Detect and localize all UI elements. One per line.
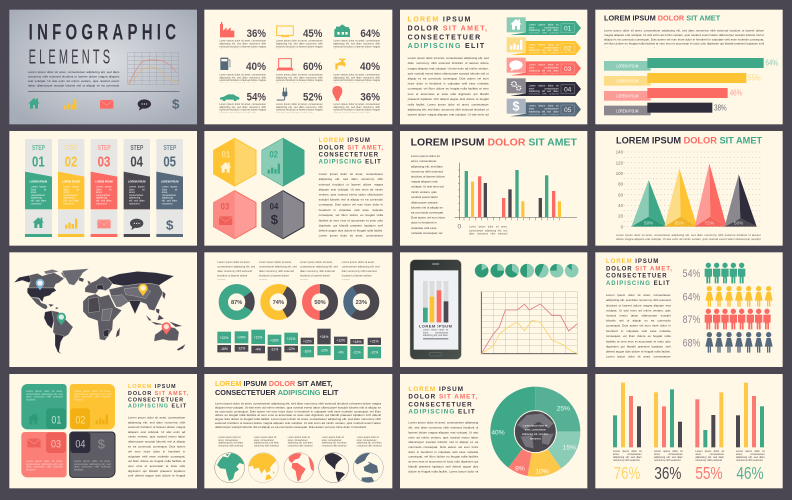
heading: CONSECTETUER ADIPISCING ELIT [215, 388, 338, 397]
stat row: 54% [683, 263, 745, 283]
pie chart: 8% [515, 466, 525, 473]
globe green [215, 453, 246, 483]
step 01 column [25, 139, 52, 237]
column group 36% [654, 389, 683, 483]
split bars: +12% [336, 339, 345, 343]
quadrant 04: $ [98, 436, 106, 451]
globe slate [353, 453, 383, 483]
pyramid yellow [664, 168, 697, 227]
stat: 40%: 40% [246, 61, 266, 73]
hexagon 02 [262, 138, 304, 186]
column group 55%: 55% [695, 463, 723, 483]
small pies [475, 264, 578, 277]
globe captions: Lorem ipsum dolor sit amet, consectetuer adipiscing elit, sed diam nonummy nibh euismod [254, 436, 279, 447]
hexagon 03 [214, 191, 256, 239]
quadrant 02: 02 [75, 415, 85, 427]
arrow 02 [507, 37, 581, 55]
step 02 column [58, 139, 84, 237]
pyramid green: 50% [644, 220, 653, 225]
bar: 38% [604, 103, 727, 115]
step 02 column: 02 [65, 155, 77, 171]
step 01 column: 01 [32, 155, 45, 171]
heading: CONSECTETUER [606, 274, 668, 280]
donut 23% [343, 283, 380, 321]
step 04 column: LOREM IPSUM [128, 180, 145, 183]
heading: LOREM IPSUM [128, 384, 177, 390]
phone [410, 260, 461, 359]
pin coral [162, 322, 171, 335]
column group 36%: 36% [654, 463, 681, 483]
icon: bars [64, 99, 76, 109]
icon: monitor [277, 26, 293, 37]
step 03 column: 03 [98, 155, 110, 171]
step 04 column: 04 [130, 155, 144, 171]
pyramid green [631, 180, 666, 227]
quadrant 03: 03 [51, 439, 61, 451]
icon: house [28, 98, 40, 109]
pin yellow [138, 284, 148, 296]
heading: LOREM IPSUM [408, 17, 472, 24]
panel: people pictograms [595, 252, 783, 367]
quadrant 04: 04 [75, 439, 85, 451]
heading: LOREM IPSUM DOLOR SIT AMET, [215, 379, 332, 388]
column group 76% [613, 383, 642, 483]
stat: 64%: 64% [360, 28, 380, 40]
step 02 column: STEP [65, 143, 78, 152]
quadrant 04 [70, 432, 115, 477]
heading: infographic: INFOGRAPHIC [29, 19, 176, 44]
stat row: 54%: 54% [683, 268, 701, 280]
bar: 46% [604, 88, 743, 101]
stat: 52%: 52% [303, 92, 322, 104]
stat: 60%: 60% [303, 61, 322, 73]
icon: laptop base [276, 68, 294, 70]
hexagon 03: 03 [221, 202, 229, 212]
arrow 02: 02 [564, 46, 572, 53]
bar: 55%: LOREM IPSUM [616, 79, 638, 84]
split bars: +34% [320, 335, 328, 339]
arrow 01: 01 [564, 26, 572, 33]
heading: ADIPISCING ELIT [606, 281, 671, 287]
bar: 55%: 55% [748, 73, 761, 83]
split bars: -4% [338, 351, 344, 355]
globe yellow [248, 453, 278, 483]
icon: fuel pump [220, 58, 230, 70]
donut 23%: 23% [356, 300, 367, 306]
quadrant 02 [70, 384, 115, 429]
arrow 05: $ [512, 100, 520, 114]
bar: 38%: LOREM IPSUM [616, 108, 638, 113]
pie chart: 10% [535, 469, 549, 476]
heading: LOREM IPSUM DOLOR SIT AMET [604, 13, 721, 22]
split bars: -31% [270, 348, 278, 352]
heading: CONSECTETUER [128, 397, 184, 403]
column group 36%: Lorem ipsum dolor sit amet, consectetuer adipiscing elit, sed diam nonummy nibh euismod [654, 450, 683, 462]
heading: LOREM IPSUM [606, 259, 659, 265]
arrow 05: 05 [564, 107, 572, 114]
donut 74% [260, 284, 297, 320]
pyramid coral: 72% [705, 220, 714, 225]
split bars [217, 329, 381, 361]
panel: globes [204, 374, 392, 488]
icon: building [334, 24, 350, 37]
hexagon 02: 02 [269, 149, 278, 159]
arrow 04: 04 [564, 87, 572, 94]
icon: tap [335, 59, 346, 70]
split bars: +18% [270, 338, 279, 342]
split bars: -12% [237, 347, 245, 351]
y axis labels and dotted grid: 60 [618, 192, 624, 197]
heading: DOLOR SIT AMET, [128, 391, 189, 397]
quadrant 02: Lorem ipsum dolor sit amet, consectetuer adipiscing elit, sed diam nonummy nibh euismod tincidunt [74, 390, 111, 401]
pie chart: 40% [491, 430, 505, 437]
split bars: -16% [303, 349, 311, 353]
stat row: 64% [683, 286, 773, 307]
heading: ADIPISCING ELIT [408, 43, 486, 50]
icon: mail [100, 100, 113, 109]
arrow 03 [507, 58, 581, 75]
bar: 46%: LOREM IPSUM [616, 94, 638, 99]
panel: five steps [9, 131, 197, 246]
phone: LOREM IPSUM [419, 324, 453, 329]
pyramid yellow: 55% [675, 220, 684, 225]
text block: Lorem ipsum dolor sit amet, consectetuer adipiscing elit, sed diam nonummy nibh euismod tincidunt ut laoreet dolore magna aliquam erat volutpat. Ut wisi enim ad minim veniam, quis nostrud exerci tation ullamcorper suscipit lobortis nisl ut aliquip ex ea commodo consequat. Duis autem vel eum iriure dolor in hendrerit in vulputate velit esse molestie consequat, vel illum dolore eu feugiat nulla facilisis at vero eros et accumsan et iusto odio dignissim qui blandit praesent luptatum zzril delenit augue duis dolore te feugait nulla facilisi. Lorem ipsum dolor sit amet, consectetuer adipiscing elit, sed diam nonummy nibh euismod tincidunt ut laoreet dolore magna aliquam erat volutpat. Ut wisi enim ad minim veniam, quis nostrud exerci tation ullamcorper suscipit lobortis nisl ut aliquip ex ea commodo consequat. Duis autem vel eum iriure dolor in hendrerit. [215, 402, 381, 429]
globe dark [319, 453, 349, 483]
y axis labels and dotted grid: 140 [616, 150, 624, 155]
chart: cover line chart [127, 53, 179, 85]
step 02 column: LOREM IPSUM [62, 180, 80, 183]
globe captions: Lorem ipsum dolor sit amet, consectetuer adipiscing elit, sed diam nonummy nibh euismod [322, 436, 346, 447]
hexagon 04: $ [271, 212, 279, 227]
stat row: 87%: 87% [683, 314, 701, 326]
y axis labels and dotted grid: 80 [618, 182, 624, 187]
pyramid coral [695, 163, 727, 227]
step 05 column: 05 [163, 155, 176, 171]
heading: DOLOR SIT AMET, [319, 145, 384, 151]
stat: 36%: 36% [360, 92, 380, 104]
quadrant 03: Lorem ipsum dolor sit amet, consectetuer adipiscing elit, sed diam nonummy nibh euismod tincidunt [26, 460, 63, 471]
icon: car [220, 94, 239, 101]
heading: LOREM IPSUM DOLOR SIT AMET [616, 136, 763, 146]
quadrant 01: Lorem ipsum dolor sit amet, consectetuer adipiscing elit, sed diam nonummy nibh euismod tincidunt [26, 390, 63, 401]
pyramid dark: 50% [734, 220, 743, 225]
icon: bulb [332, 86, 342, 101]
phone: Lorem ipsum dolor sit amet, consectetuer adipiscing elit, sed diam [423, 329, 448, 337]
heading: DOLOR SIT AMET, [408, 26, 488, 33]
column group 76%: 76% [614, 463, 640, 483]
panel: arrows list [400, 10, 587, 124]
stat: 54%: 54% [247, 92, 266, 104]
step 05 column: STEP [163, 143, 176, 152]
icon: plug [277, 88, 287, 100]
panel: donuts and split bars [204, 252, 392, 367]
bar: 55% [604, 73, 761, 86]
stat: 40%: 40% [360, 61, 380, 73]
step 05 column: $ [166, 217, 174, 232]
hexagon 01 [214, 138, 256, 186]
split bars: -16% [220, 347, 228, 351]
heading: CONSECTETUER [408, 34, 481, 41]
panel: phone and line chart [400, 252, 587, 367]
split bars: -21% [353, 350, 361, 354]
globe captions: Lorem ipsum dolor sit amet, consectetuer adipiscing elit, sed diam nonummy nibh euismod [357, 436, 381, 447]
globe captions [218, 436, 382, 450]
arrow 01 [507, 17, 581, 35]
column group 46% [736, 383, 765, 483]
bar: 38%: 38% [714, 103, 727, 113]
arrow 03: 03 [564, 66, 572, 73]
icon: factory [220, 22, 234, 37]
panel: grouped columns [595, 374, 783, 488]
split bars: +12% [254, 335, 262, 339]
heading: LOREM IPSUM [408, 386, 464, 393]
globe captions: Lorem ipsum dolor sit amet, consectetuer adipiscing elit, sed diam nonummy nibh euismod [218, 436, 243, 447]
step 05 column [156, 139, 183, 237]
hexagon 04 [262, 191, 304, 239]
panel: pyramids [595, 131, 783, 246]
globe coral [284, 453, 315, 483]
heading: DOLOR SIT AMET, [606, 266, 673, 272]
arrow 05 [507, 99, 581, 116]
pie chart [490, 387, 580, 477]
stat row: 64%: 64% [683, 291, 701, 303]
line chart [481, 292, 577, 354]
hexagon 04: 04 [270, 202, 279, 212]
step 01 column: STEP [32, 143, 45, 152]
quadrant 01: 01 [51, 415, 61, 427]
stat: 45%: 45% [303, 28, 322, 40]
donut 87% [218, 283, 255, 321]
panel: pie chart [400, 374, 587, 488]
split bars: -4% [255, 348, 261, 352]
bar: 64% [604, 58, 778, 71]
icon: dollar: $ [172, 97, 180, 112]
split bars: +21% [370, 340, 379, 344]
bar: 64%: LOREM IPSUM [616, 64, 638, 69]
pie chart: 15% [563, 445, 576, 452]
pin blue [36, 279, 44, 290]
split bars: -12% [287, 347, 295, 351]
panel: world map [9, 252, 197, 367]
quadrant 03 [21, 432, 67, 477]
pyramid dark [725, 174, 757, 227]
stat row: 68% [683, 332, 773, 353]
column group 55%: Lorem ipsum dolor sit amet, consectetuer adipiscing elit, sed diam nonummy nibh euismod [695, 450, 724, 462]
donut 87%: 87% [231, 300, 242, 306]
step 04 column: STEP [130, 143, 143, 152]
heading: DOLOR SIT AMET, [408, 394, 478, 401]
split bars: +22% [220, 336, 228, 340]
heading: ADIPISCING ELIT [408, 409, 476, 416]
heading: CONSECTETUER [319, 153, 379, 159]
text columns [217, 260, 380, 280]
hexagon 01: 01 [222, 149, 230, 159]
stat: 36%: 36% [247, 28, 266, 40]
map: continents [14, 269, 186, 354]
split bars: +18% [353, 340, 361, 344]
icon: speech bubble [138, 99, 151, 111]
column group 46%: 46% [736, 463, 764, 483]
pie chart: Lorem ipsum dolor sit amet, consectetuer adipiscing elit, sed diam nonummy [522, 424, 549, 440]
y axis labels and dotted grid: 40 [618, 203, 624, 208]
column group 46%: Lorem ipsum dolor sit amet, consectetuer adipiscing elit, sed diam nonummy nibh euismod [736, 450, 765, 462]
y axis labels and dotted grid: 120 [616, 160, 624, 165]
heading: CONSECTETUER [408, 401, 473, 408]
heading: ADIPISCING ELIT [128, 404, 187, 410]
arrow 04 [507, 78, 581, 96]
y axis labels and dotted grid [616, 150, 761, 229]
panel: cover title [9, 10, 197, 124]
bar: 46%: 46% [730, 88, 743, 98]
quadrant 01 [21, 384, 67, 429]
column group 55% [695, 392, 724, 483]
quadrant 04: Lorem ipsum dolor sit amet, consectetuer adipiscing elit, sed diam nonummy nibh euismod tincidunt [74, 460, 111, 471]
step 03 column: STEP [98, 143, 111, 152]
heading: LOREM IPSUM DOLOR SIT AMET [411, 137, 577, 148]
y axis labels and dotted grid: 0 [621, 224, 624, 229]
donut 74%: 74% [273, 300, 284, 306]
column group 76%: Lorem ipsum dolor sit amet, consectetuer adipiscing elit, sed diam nonummy nibh euismod [613, 450, 642, 462]
step 04 column [124, 139, 150, 237]
heading: ADIPISCING ELIT [319, 160, 382, 166]
step 03 column [91, 139, 117, 237]
stat row: 68%: 68% [683, 337, 701, 349]
panel: icon percentages [204, 10, 392, 124]
pie chart: 25% [557, 405, 570, 412]
split bars: +22% [303, 339, 312, 343]
pin green [57, 313, 66, 325]
step 05 column: LOREM IPSUM [161, 180, 178, 183]
chart: columns: 0 [457, 224, 461, 231]
split bars: +24% [237, 336, 246, 340]
panel: clustered columns [400, 131, 587, 246]
panel: hexagons [204, 131, 392, 246]
donut 50%: 50% [314, 300, 326, 306]
panel: horizontal bars [595, 10, 783, 124]
heading: LOREM IPSUM [319, 138, 371, 144]
globe captions: Lorem ipsum dolor sit amet, consectetuer adipiscing elit, sed diam nonummy nibh euismod [288, 436, 312, 447]
panel: rounded quadrants [9, 374, 197, 488]
split bars: -12% [320, 349, 328, 353]
step 03 column: LOREM IPSUM [95, 180, 113, 183]
donut 50% [307, 289, 333, 315]
chart: columns [455, 163, 577, 231]
stat row: 87% [683, 309, 771, 329]
split bars: -12% [370, 351, 378, 355]
heading: elements: ELEMENTS [29, 46, 110, 68]
y axis labels and dotted grid: 20 [618, 214, 624, 219]
y axis labels and dotted grid: 100 [616, 171, 624, 176]
split bars: +21% [287, 337, 295, 341]
step 01 column: LOREM IPSUM [30, 180, 47, 183]
bar: 64%: 64% [765, 58, 778, 68]
icon: laptop [279, 59, 291, 68]
